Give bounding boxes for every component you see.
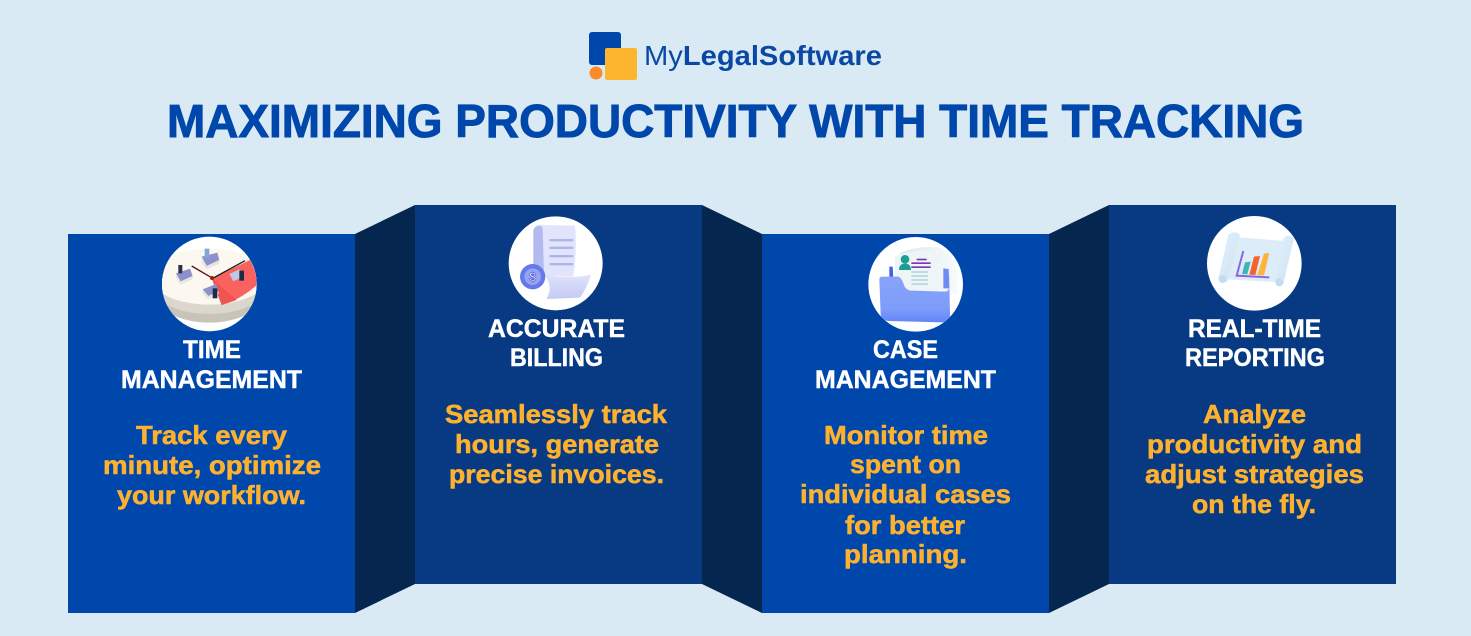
icon: invoice with coin bbox=[509, 216, 603, 310]
icon: chart on scroll bbox=[1207, 216, 1302, 311]
heading: BILLING bbox=[510, 344, 603, 372]
description: Seamlessly track bbox=[445, 399, 668, 429]
description bbox=[103, 420, 321, 510]
heading bbox=[815, 336, 996, 394]
description: productivity and bbox=[1147, 429, 1362, 459]
fold connectors bbox=[355, 205, 1109, 613]
description: on the fly. bbox=[1192, 489, 1316, 519]
logo wordmark: MyLegalSoftware bbox=[644, 40, 882, 71]
panel: real-time reporting bbox=[1109, 205, 1396, 584]
icon: clock with desks bbox=[162, 236, 257, 332]
description: adjust strategies bbox=[1145, 459, 1364, 489]
heading bbox=[121, 336, 302, 394]
heading: MANAGEMENT bbox=[121, 366, 302, 394]
panel: case management bbox=[762, 234, 1049, 613]
description: precise invoices. bbox=[449, 459, 664, 489]
panel: time management bbox=[68, 234, 355, 613]
description: Track every bbox=[136, 420, 288, 450]
description: Monitor time bbox=[824, 420, 988, 450]
description bbox=[800, 420, 1011, 569]
heading: CASE bbox=[873, 336, 938, 364]
title: MAXIMIZING PRODUCTIVITY WITH TIME TRACKING bbox=[167, 95, 1304, 147]
logo bbox=[589, 32, 882, 80]
panel: accurate billing bbox=[415, 205, 702, 584]
description: planning. bbox=[844, 539, 967, 569]
heading bbox=[488, 315, 625, 372]
description: minute, optimize bbox=[103, 450, 321, 480]
icon: invoice with coin: $ bbox=[529, 270, 536, 284]
heading: ACCURATE bbox=[488, 315, 625, 343]
description: hours, generate bbox=[455, 429, 659, 459]
description bbox=[1145, 399, 1364, 519]
description: your workflow. bbox=[117, 480, 306, 510]
logo mark bbox=[589, 32, 637, 80]
description: for better bbox=[845, 510, 965, 540]
heading: TIME bbox=[183, 336, 241, 364]
heading: MANAGEMENT bbox=[815, 366, 996, 394]
description bbox=[445, 399, 668, 489]
heading: REAL-TIME bbox=[1188, 315, 1321, 343]
heading: REPORTING bbox=[1185, 344, 1325, 372]
description: individual cases bbox=[800, 479, 1011, 509]
icon: folder with document bbox=[868, 237, 963, 332]
description: Analyze bbox=[1203, 399, 1306, 429]
description: spent on bbox=[850, 449, 961, 479]
heading bbox=[1185, 315, 1325, 372]
